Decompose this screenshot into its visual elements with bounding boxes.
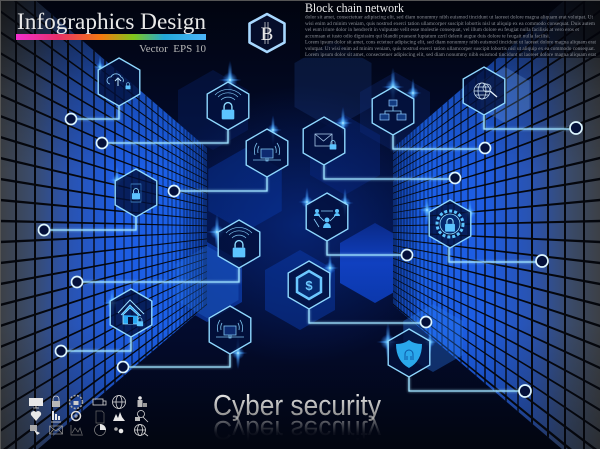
body text — [305, 14, 596, 58]
rainbow bar — [16, 34, 206, 40]
body text: vel eum iriure dolor in hendrerit in vulputate velit esse molestie consequat, vel illum dolore eu feugiat nulla facilisis at vero eros et — [305, 26, 579, 33]
node: shield — [388, 329, 531, 397]
body text: accumsan et iusto odio dignissim qui blandit praesent luptatum zzril delenit augue duis dolore te feugait nulla facilisi. — [305, 32, 550, 40]
node: home — [56, 289, 152, 356]
node: phone lock — [38, 169, 157, 236]
background hexagons — [172, 41, 430, 330]
right grid wall — [393, 1, 600, 449]
node: cloud lock — [66, 58, 140, 124]
body text: volutpat. Ut wisi enim ad minim veniam, quis nostrud exerci tation ullamcorper suscipit lobortis nisl ut aliquip ex ea commodo consequat. — [305, 46, 595, 52]
icon: bitcoin hexagon badge: B — [261, 24, 273, 45]
body text: Lorem ipsum dolor sit amet, consectetuer adipiscing elit, sed diam nonummy nibh euismod tincidunt ut laoreet dolore magna aliquam erat — [305, 52, 596, 58]
node: envelope lock — [303, 117, 460, 184]
node: wifi lock — [96, 82, 249, 148]
wall overlay hexagons — [176, 67, 530, 372]
body text: wisi enim ad minim veniam, quis nostrud exerci tation ullamcorper suscipit lobortis nisl ut aliquip ex ea commodo consequat. Duis autem — [305, 21, 596, 27]
node: wifi lock lower — [72, 220, 260, 288]
node: network — [372, 87, 490, 154]
left grid wall — [1, 1, 207, 449]
body text: dolor sit amet, consectetuer adipiscing elit, sed diam nonummy nibh euismod tincidunt ut laoreet dolore magna aliquam erat volutpat. Ut — [305, 14, 593, 20]
node: monitor signal — [168, 129, 288, 196]
heading: block chain network: Block chain network — [305, 1, 405, 15]
node: monitor signal lower — [118, 306, 251, 372]
node: dollar: $ — [305, 278, 313, 293]
icon set — [29, 396, 148, 436]
icon: bitcoin hexagon badge — [250, 14, 284, 52]
central glow — [160, 85, 440, 365]
node: dollar — [288, 261, 432, 328]
subtitle: Vector EPS 10 — [139, 43, 206, 55]
light flares — [93, 55, 479, 370]
dark top fade behind text — [300, 0, 600, 58]
node: gear lock — [429, 200, 548, 267]
node: people network — [306, 193, 412, 260]
heading reflection: Cyber security — [213, 415, 381, 445]
node: globe search — [463, 67, 582, 134]
title: Infographics Design — [17, 9, 206, 34]
heading: cyber security: Cyber security — [213, 390, 381, 422]
body text: Lorem ipsum dolor sit amet, cons ectetuer adipiscing elit, sed diam nonummy nibh euismod tincidunt ut laoreet dolore magna aliquam erat — [305, 40, 596, 46]
